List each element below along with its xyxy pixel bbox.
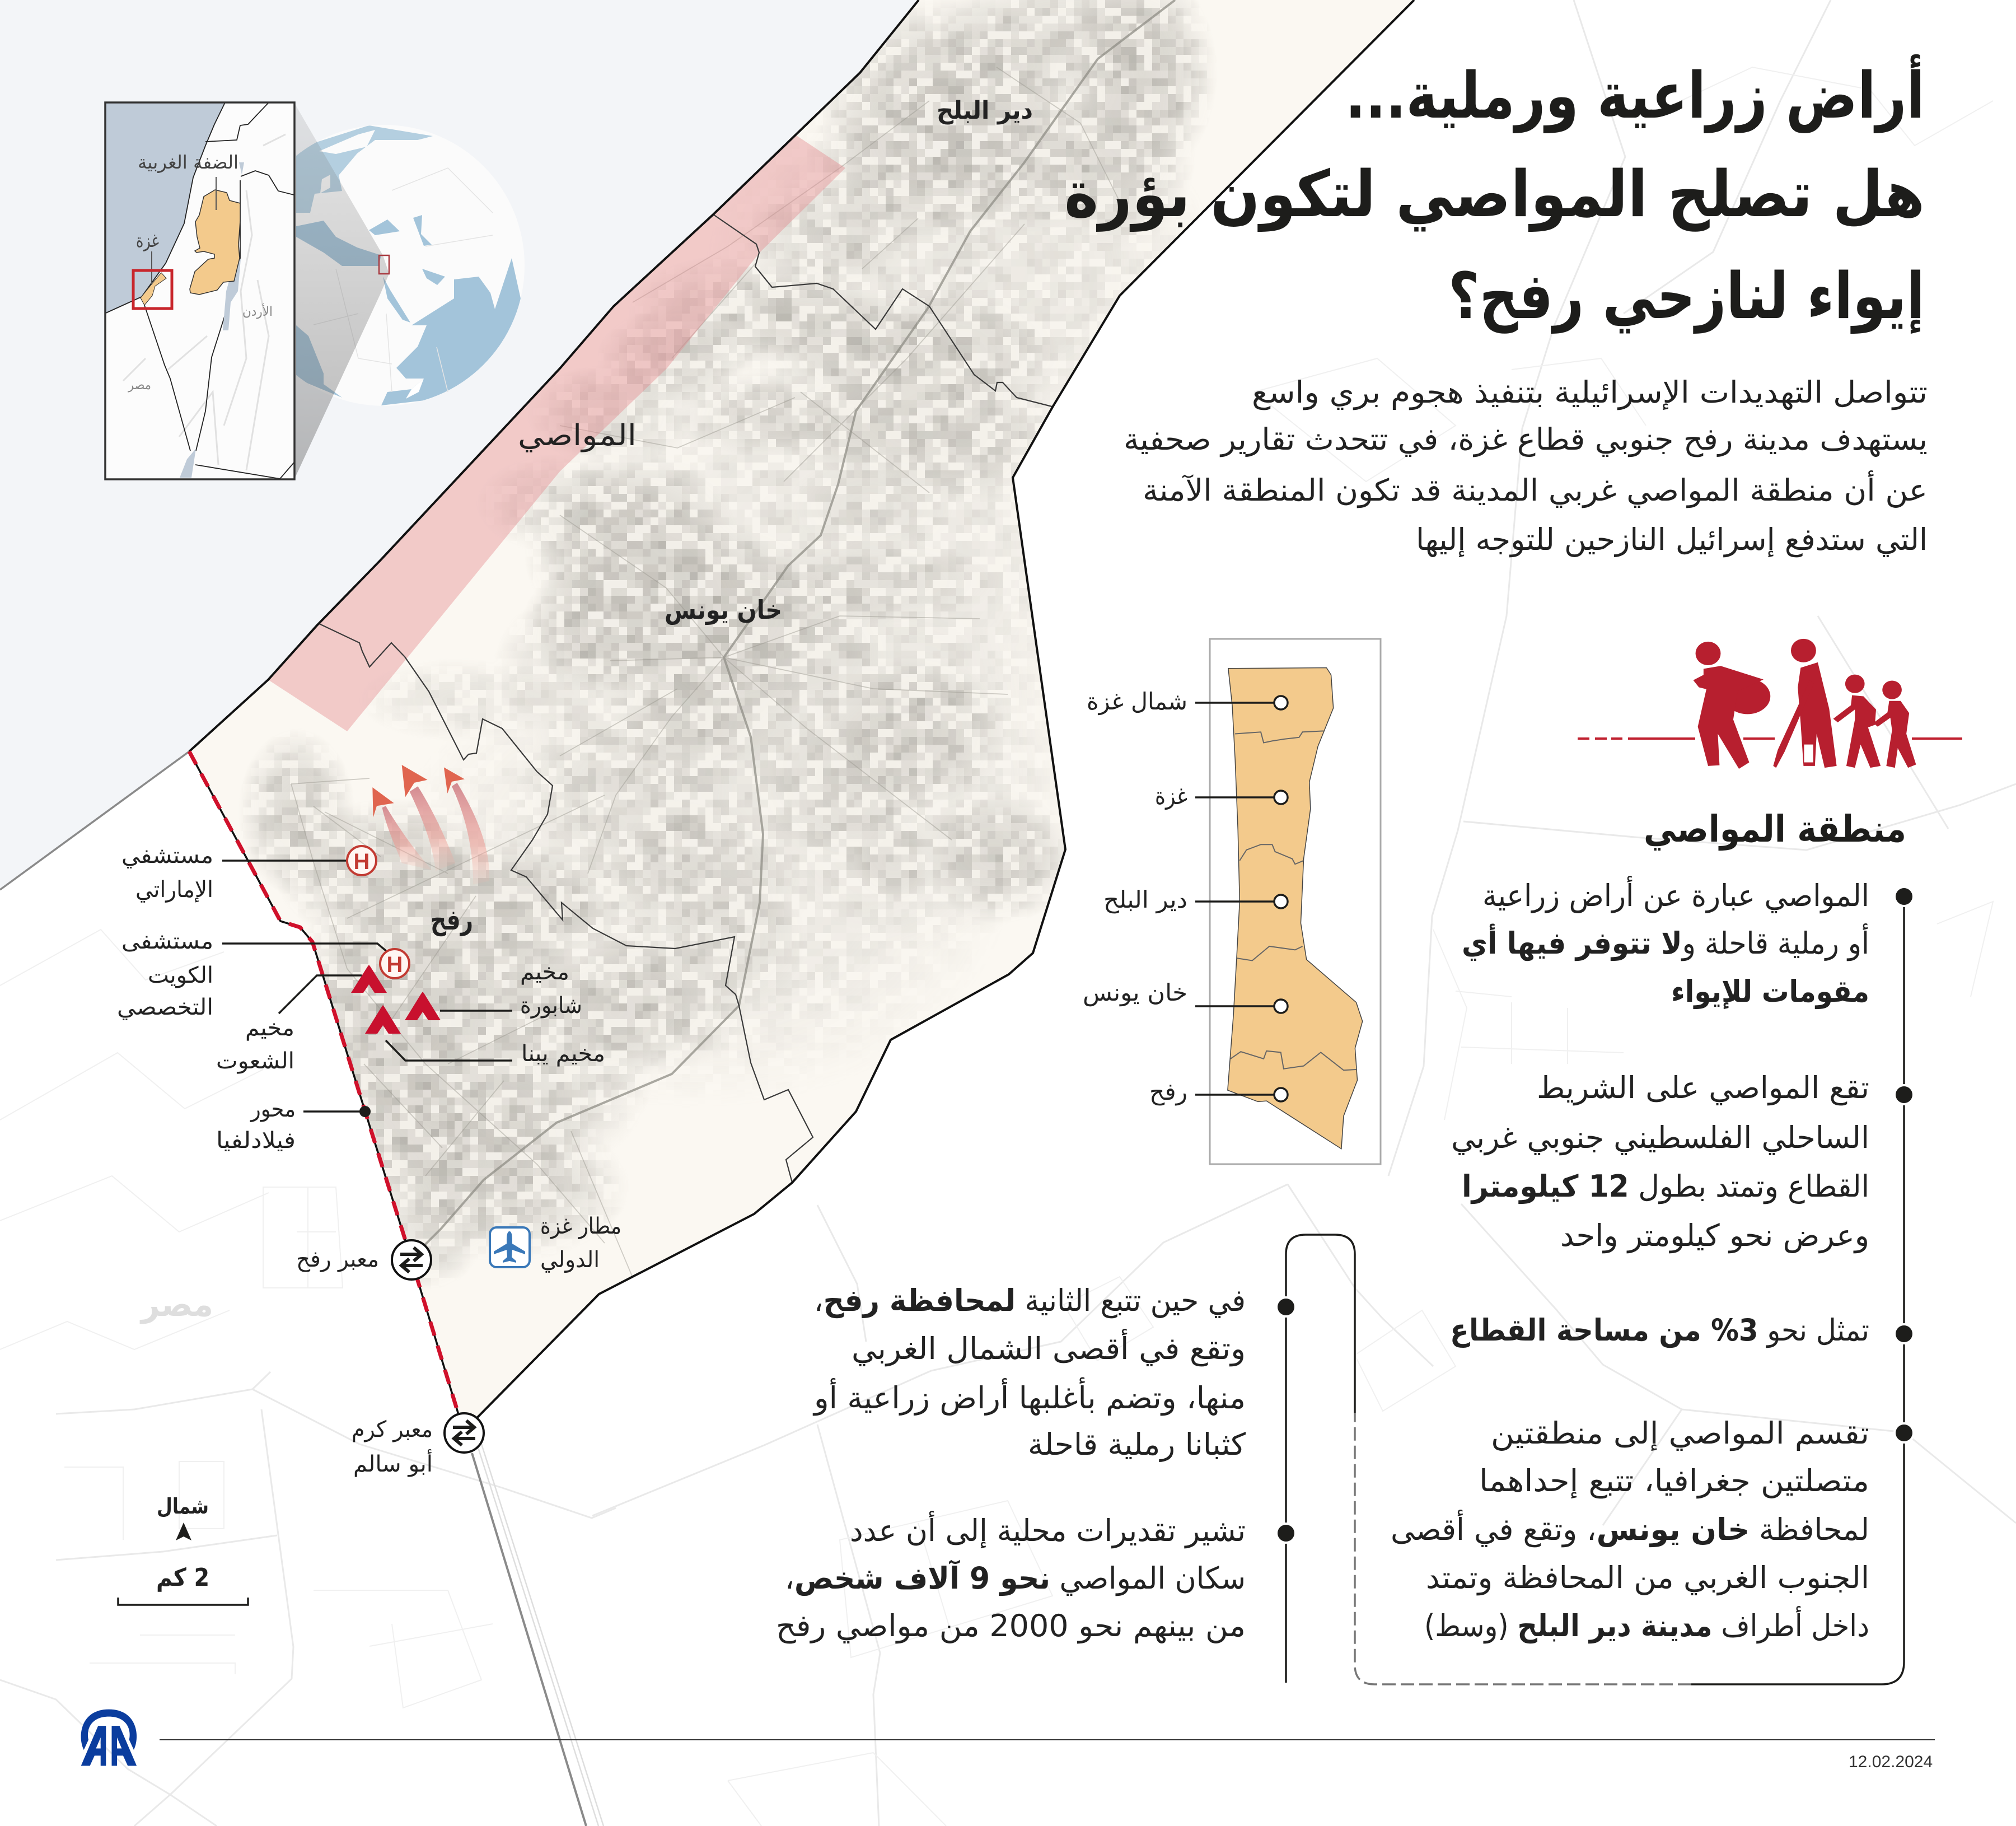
inset locator map [105,102,294,479]
north arrow: شمال [157,1494,209,1519]
callout: Yibna camp [365,1005,605,1067]
sea shoreline [0,751,189,890]
coastline [189,0,919,751]
text block: Rafah part: في حين تتبع الثانية لمحافظة رفح، [814,1283,1246,1319]
inset: borders [106,102,294,479]
inset: leader lines [152,177,216,285]
southern Gaza Strip map [0,0,1456,1826]
inset: frame [105,102,294,479]
text block: population: تشير تقديرات محلية إلى أن عدد [850,1511,1246,1548]
logo: AA [81,1710,137,1766]
callout: Emirati hospital [121,843,376,903]
eastern border [478,0,1414,1417]
label: airport: الدولي [540,1247,600,1273]
heading: Mawasi area: منطقة المواصي [1644,807,1906,851]
text block: description [1462,876,1869,1009]
inset: terrain [123,134,286,470]
text block: Rafah part: منها، وتضم بأغلبها أراض زراعية أو [812,1377,1246,1416]
label: Kerem Abu Salem: أبو سالم [353,1449,433,1477]
label: Shaout camp [216,1015,294,1074]
icon: airport [490,1227,530,1267]
text block: two regions: تقسم المواصي إلى منطقتين [1491,1416,1869,1451]
text block: location: تقع المواصي على الشريط [1537,1070,1869,1106]
label: Shaboura camp: مخيم [520,959,569,985]
text block: Rafah part: وتقع في أقصى الشمال الغربي [852,1329,1246,1367]
icon: displaced family [1578,639,1962,769]
icon: tent [351,965,387,993]
title: هل تصلح المواصي لتكون بؤرة [1064,157,1925,232]
icon: tent [405,992,441,1020]
icon: crossing [445,1413,484,1453]
globe location marker [379,255,389,274]
label: Philadelphi [216,1096,296,1153]
label: Khan Younis: خان يونس [665,595,782,625]
callout: Kerem Abu Salem crossing [352,1413,484,1477]
label: Rafah crossing: معبر رفح [296,1246,379,1272]
text block: description: المواصي عبارة عن أراض زراعية [1482,876,1869,913]
label: Deir al-Balah: دير البلح [937,96,1033,125]
strip land [189,0,1414,1433]
inset: Gaza [141,273,166,305]
arrow 2 [402,765,455,871]
label: Shaboura camp: شابورة [520,993,582,1019]
text block: Rafah part: كثبانا رملية قاحلة [1028,1427,1246,1462]
Mawasi highlighted band [268,135,845,731]
scale bar [118,1563,248,1605]
text block: Rafah part [812,1283,1246,1462]
inset: label west bank: الضفة الغربية [138,151,238,173]
arrow 3 [444,767,489,885]
title [1064,54,1925,334]
inset: water bodies [180,162,244,478]
icon: crossing [392,1240,431,1279]
sea background [0,0,919,890]
text block: population: من بينهم نحو 2000 من مواصي رفح [776,1608,1246,1644]
icon: hospital: H [387,952,403,977]
timeline connector [1278,888,1912,1684]
text block: two regions [1391,1416,1869,1643]
globe locator [296,125,521,405]
label: Yibna camp: مخيم يبنا [521,1041,605,1067]
text block: location: القطاع وتمتد بطول 12 كيلومترا [1462,1169,1869,1204]
label: Egypt: مصر [139,1285,213,1324]
icon: hospital [380,949,409,978]
text block: two regions: لمحافظة خان يونس، وتقع في أقصى [1391,1510,1869,1548]
inset: Mediterranean sea [105,102,225,313]
marker: Khan Younis [1195,1000,1288,1013]
person on crutches [1773,639,1837,768]
scale bar: 2 كم [156,1563,209,1592]
intro paragraph: يستهدف مدينة رفح جنوبي قطاع غزة، في تتحدث تقارير صحفية [1124,422,1928,457]
child 1 [1833,675,1881,768]
marker: Rafah [1195,1088,1288,1101]
label: Philadelphi: محور [250,1096,296,1122]
mini map: boundaries [1231,731,1356,1070]
label: Emirati hospital: مستشفي [121,843,213,868]
intro paragraph: التي ستدفع إسرائيل النازحين للتوجه إليها [1416,522,1928,558]
icon: tent [365,1005,401,1034]
label: airport: مطار غزة [540,1213,621,1239]
title: إيواء لنازحي رفح؟ [1448,259,1925,334]
inset: label egypt: مصر [128,378,151,393]
text block: two regions: الجنوب الغربي من المحافظة وتمتد [1426,1560,1869,1595]
label: Kuwaiti hospital [117,928,213,1020]
road to south [472,1453,586,1826]
panel: governorates mini map [1083,639,1381,1164]
label: Khan Younis: خان يونس [1083,979,1187,1006]
label: Shaout camp: مخيم [245,1015,294,1041]
label: Kuwaiti hospital: التخصصي [117,994,213,1020]
label: Emirati hospital [121,843,213,903]
intro paragraph: تتواصل التهديدات الإسرائيلية بتنفيذ هجوم بري واسع [1252,375,1928,410]
text block: description: أو رملية قاحلة ولا تتوفر فيها أي [1462,923,1869,961]
label: Kerem Abu Salem [352,1417,433,1477]
man with bag [1693,642,1770,769]
label: Kerem Abu Salem: معبر كرم [352,1417,433,1442]
icon: hospital: H [354,849,369,874]
text block: description: مقومات للإيواء [1671,974,1869,1009]
text block: location: وعرض نحو كيلومتر واحد [1560,1218,1869,1253]
label: Gaza: غزة [1155,782,1187,810]
inset: West Bank [190,190,240,295]
intro paragraph: عن أن منطقة المواصي غربي المدينة قد تكون المنطقة الآمنة [1143,470,1928,508]
inset: label jordan: الأردن [242,303,273,319]
inset: label gaza: غزة [136,230,159,251]
callout: Kuwaiti hospital [117,928,409,1020]
callout: Rafah crossing [296,1240,431,1279]
label: Kuwaiti hospital: مستشفى [121,928,213,954]
marker: North Gaza [1195,696,1288,709]
callout: Philadelphi axis [216,1096,371,1153]
text block: two regions: متصلتين جغرافيا، تتبع إحداهما [1479,1463,1869,1499]
arrow 1 [372,787,432,870]
callout: Gaza airport [490,1213,621,1273]
label: Rafah: رفح [431,904,473,937]
label: Shaboura camp [520,959,582,1019]
text block: two regions: داخل أطراف مدينة دير البلح (وسط) [1424,1606,1869,1643]
label: Deir al-Balah: دير البلح [1103,886,1187,914]
label: airport [540,1213,621,1273]
governorate boundaries [713,214,1054,407]
north arrow [157,1494,209,1540]
label: Kuwaiti hospital: الكويت [148,963,213,988]
label: Shaout camp: الشعوت [216,1048,294,1074]
inset: red extent box [133,270,172,309]
mini map: strip shape [1228,667,1363,1149]
text block: location: الساحلي الفلسطيني جنوبي غربي [1451,1120,1869,1155]
label: Emirati hospital: الإماراتي [135,877,213,903]
text block: share of strip: تمثل نحو 3% من مساحة القطاع [1450,1313,1869,1348]
text block: location [1451,1070,1869,1253]
text block: population: سكان المواصي نحو 9 آلاف شخص، [785,1559,1246,1596]
marker: Gaza [1195,791,1288,804]
intro paragraph [1124,375,1928,558]
date: 12.02.2024 [1849,1753,1933,1771]
displacement arrows [372,765,489,885]
label: Philadelphi: فيلادلفيا [216,1128,296,1153]
label: Rafah: رفح [1149,1078,1187,1106]
built-up density [244,0,1210,1285]
callout: Shaboura camp [405,959,582,1020]
text block: population [776,1511,1246,1644]
marker: Deir al-Balah [1195,895,1288,908]
zoom projection wedge [295,104,389,478]
label: North Gaza: شمال غزة [1087,688,1187,715]
child 2 [1873,680,1916,768]
callout: Shaout camp [216,965,387,1074]
icon: hospital [347,846,376,875]
label: Mawasi: المواصي [518,419,637,452]
road network [392,0,1175,1277]
footer rule [160,1739,1935,1740]
Philadelphi corridor border [189,751,464,1433]
